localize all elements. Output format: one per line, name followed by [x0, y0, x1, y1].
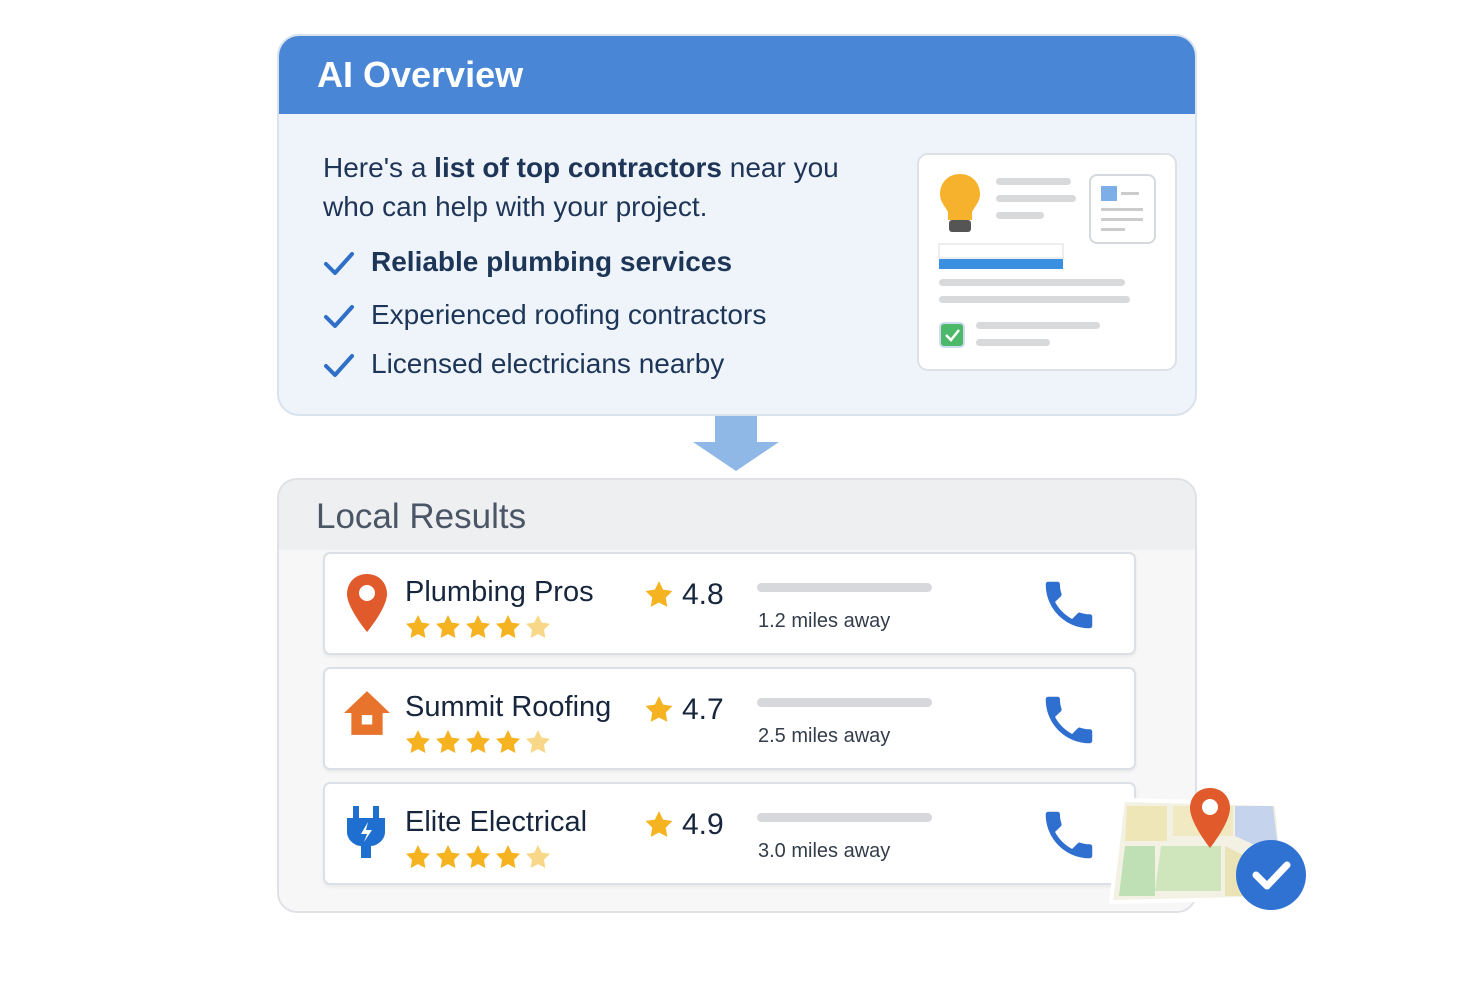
- card: Elite Electrical: [323, 782, 1136, 885]
- title: AI Overview: [317, 54, 523, 95]
- heading: Local Results: [316, 497, 526, 536]
- stars: [406, 615, 550, 638]
- item 1: Reliable plumbing services: [371, 246, 732, 277]
- card: Summit Roofing: [323, 667, 1136, 770]
- card: Plumbing Pros: [323, 552, 1136, 655]
- rating star: [646, 811, 672, 837]
- rating: 4.9: [682, 808, 724, 841]
- rating star: [646, 581, 672, 607]
- rating star: [646, 696, 672, 722]
- intro text: Here's a list of top contractors near you: [323, 152, 839, 183]
- icon: phone: [1046, 812, 1092, 858]
- stars: [406, 845, 550, 868]
- icon: plug: [347, 806, 385, 858]
- illustration: document card: [917, 153, 1177, 371]
- icon: house: [344, 691, 390, 735]
- distance: 2.5 miles away: [758, 725, 890, 747]
- panel: Local Results: [277, 478, 1197, 913]
- header: [279, 480, 1199, 550]
- name: Elite Electrical: [405, 806, 587, 838]
- icon: phone: [1046, 582, 1092, 628]
- rating: 4.8: [682, 578, 724, 611]
- intro text: who can help with your project.: [323, 191, 707, 222]
- distance: 1.2 miles away: [758, 610, 890, 632]
- intro text: [323, 152, 839, 222]
- icon: map with pin and check: [1110, 788, 1306, 910]
- icon: phone: [1046, 696, 1092, 744]
- header bar: [279, 36, 1199, 114]
- name: Summit Roofing: [405, 691, 611, 723]
- panel: AI Overview: [277, 34, 1197, 416]
- item 2: Experienced roofing contractors: [371, 299, 766, 330]
- distance: 3.0 miles away: [758, 840, 890, 862]
- item 3: Licensed electricians nearby: [371, 348, 724, 379]
- checklist: [324, 246, 766, 379]
- rating: 4.7: [682, 693, 724, 726]
- name: Plumbing Pros: [405, 576, 594, 608]
- stars: [406, 730, 550, 753]
- arrow: down: [693, 416, 779, 471]
- icon: location pin: [347, 574, 387, 632]
